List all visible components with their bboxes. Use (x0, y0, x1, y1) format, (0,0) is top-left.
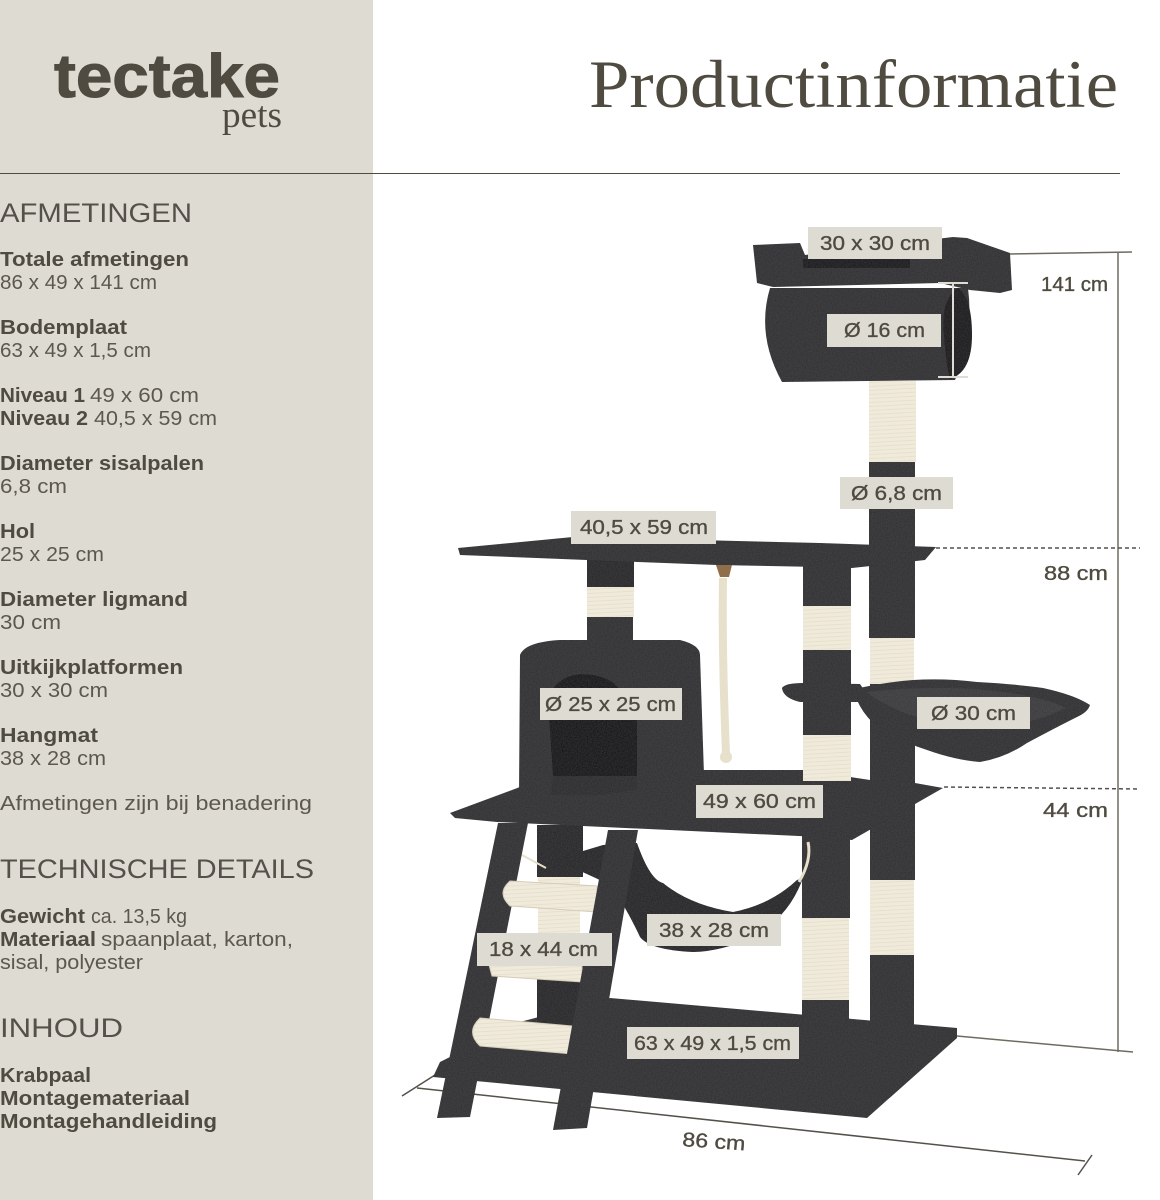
section: inhoud: Krabpaal (0, 1065, 91, 1087)
tag: Ø 30 cm (917, 697, 1030, 729)
section: afmetingen: Hol (0, 521, 35, 543)
height label: 44 cm: 44 cm (1043, 800, 1108, 822)
section: afmetingen: 30 cm (0, 612, 61, 634)
tag: Ø 6,8 cm (840, 477, 953, 509)
tag: 40,5 x 59 cm (571, 511, 716, 544)
section: afmetingen: 86 x 49 x 141 cm (0, 272, 157, 294)
tag: 49 x 60 cm (696, 785, 823, 818)
ladder (437, 823, 638, 1130)
section: afmetingen: 30 x 30 cm (0, 680, 108, 702)
tag: Ø 16 cm (827, 314, 941, 347)
section: afmetingen: Niveau 2 (0, 408, 88, 430)
middle post (803, 565, 851, 811)
section: technische details: sisal, polyester (0, 952, 143, 974)
section: afmetingen: Niveau 1 (0, 385, 85, 407)
cat house (519, 640, 704, 812)
section: afmetingen: Totale afmetingen (0, 249, 189, 271)
hammock bowl (782, 679, 1090, 762)
ladder rungs (472, 881, 597, 1054)
tall right post (869, 381, 916, 1040)
section: afmetingen: AFMETINGEN (0, 198, 192, 228)
tag: Ø 25 x 25 cm: Ø 25 x 25 cm (545, 694, 676, 716)
tag: 40,5 x 59 cm: 40,5 x 59 cm (580, 517, 708, 539)
height label: 88 cm: 88 cm (1044, 563, 1108, 585)
tag: 30 x 30 cm: 30 x 30 cm (820, 233, 930, 255)
lower platform (450, 770, 943, 840)
section: afmetingen: Hangmat (0, 725, 98, 747)
section: afmetingen: Afmetingen zijn bij benadering (0, 793, 312, 815)
tag: 38 x 28 cm: 38 x 28 cm (659, 920, 769, 942)
dimension lines (402, 252, 1140, 1175)
upper platform (458, 537, 936, 568)
width label: 86 cm: 86 cm (682, 1129, 746, 1155)
hanging rope toy (716, 565, 732, 763)
tag: 30 x 30 cm (808, 227, 942, 259)
section: afmetingen: 40,5 x 59 cm (94, 408, 217, 430)
section: technische details: TECHNISCHE DETAILS (0, 854, 314, 884)
section: afmetingen: 6,8 cm (0, 476, 67, 498)
section: technische details: Gewicht (0, 906, 85, 928)
tag: 63 x 49 x 1,5 cm (627, 1027, 799, 1059)
section: technische details: spaanplaat, karton, (101, 929, 293, 951)
section: afmetingen (0, 198, 312, 815)
logo: tectake pets: pets (222, 95, 282, 136)
section: afmetingen: Bodemplaat (0, 317, 127, 339)
left panel background (0, 0, 373, 1200)
section: inhoud (0, 1013, 217, 1133)
section: afmetingen: 25 x 25 cm (0, 544, 104, 566)
tag: 63 x 49 x 1,5 cm: 63 x 49 x 1,5 cm (634, 1033, 791, 1055)
section: afmetingen: 63 x 49 x 1,5 cm (0, 340, 151, 362)
tag: Ø 30 cm: Ø 30 cm (931, 703, 1016, 725)
section: technische details: Materiaal (0, 929, 96, 951)
tube diameter marker (938, 283, 968, 377)
logo: tectake pets (54, 42, 282, 136)
section: afmetingen: Diameter sisalpalen (0, 453, 204, 475)
section: afmetingen: Uitkijkplatformen (0, 657, 183, 679)
panel: product specifications (0, 198, 314, 1133)
hanging hammock (522, 842, 809, 952)
tag: 18 x 44 cm (477, 933, 612, 966)
ladder right rail (553, 830, 638, 1130)
section: inhoud: Montagehandleiding (0, 1111, 217, 1133)
section: technische details (0, 854, 314, 974)
tube bed (765, 259, 972, 382)
ladder left rail (437, 823, 528, 1118)
section: inhoud: Montagemateriaal (0, 1088, 190, 1110)
section: afmetingen: 38 x 28 cm (0, 748, 106, 770)
upper post (587, 560, 634, 650)
back post (537, 825, 583, 1028)
tag: Ø 16 cm: Ø 16 cm (844, 320, 925, 342)
tag: Ø 6,8 cm: Ø 6,8 cm (851, 483, 942, 505)
illustration: cat tree (433, 237, 1090, 1130)
logo: tectake pets: tectake (54, 42, 280, 110)
section: afmetingen: Diameter ligmand (0, 589, 188, 611)
tag: Ø 25 x 25 cm (540, 688, 682, 720)
section: afmetingen: 49 x 60 cm (90, 385, 199, 407)
height label: 141 cm: 141 cm (1041, 274, 1108, 296)
tag: 38 x 28 cm (647, 914, 781, 946)
tag: 49 x 60 cm: 49 x 60 cm (703, 791, 816, 813)
base plate (433, 998, 957, 1118)
measurement tags (477, 227, 1030, 1059)
top platform (753, 237, 1012, 293)
section: inhoud: INHOUD (0, 1013, 123, 1043)
tag: 18 x 44 cm: 18 x 44 cm (489, 939, 598, 961)
title: Productinformatie (589, 46, 1118, 122)
header divider line (0, 173, 1120, 174)
lower front post (802, 835, 850, 1090)
section: technische details: ca. 13,5 kg (91, 906, 187, 928)
